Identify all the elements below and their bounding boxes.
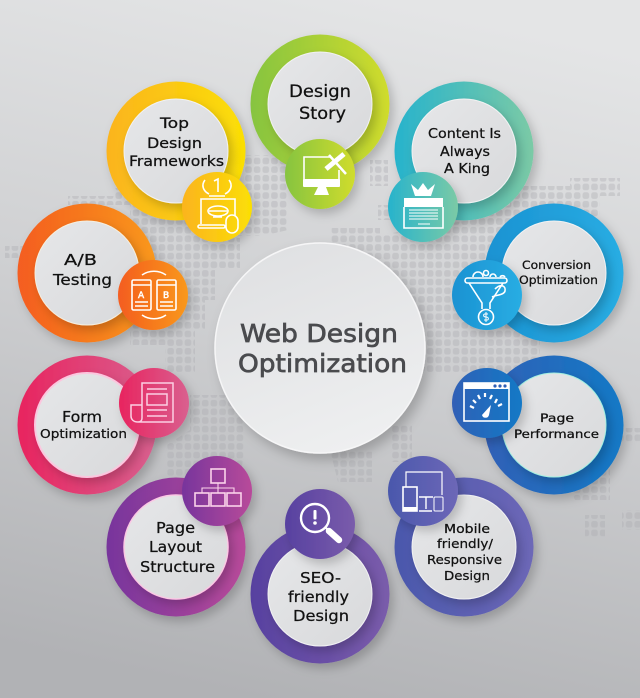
- icon: browser speed gauge: [464, 383, 509, 421]
- panel: Content Is Always A King: [388, 82, 534, 242]
- label: Page Layout Structure: Page: [156, 519, 195, 537]
- label: Content Is Always A King: [428, 127, 501, 177]
- panel: A/B Testing: [18, 204, 188, 342]
- icon: A/B browser windows: B: [163, 291, 169, 301]
- panel: Page Performance: [452, 356, 624, 494]
- icon: magnifier with exclamation: [301, 504, 339, 540]
- icon: monitor and pencil: [303, 154, 346, 195]
- label: A/B Testing: A/B: [64, 251, 97, 269]
- label: Page Layout Structure: Layout: [149, 538, 202, 556]
- label: SEO-friendly Design: Design: [293, 607, 349, 625]
- label: Form Optimization: Form: [62, 408, 102, 426]
- label: A/B Testing: Testing: [52, 271, 112, 289]
- label: Design Story: Design: [289, 82, 351, 102]
- label: Mobile friendly / Responsive Design: Responsive: [427, 552, 502, 567]
- label: Mobile friendly / Responsive Design: Mobile: [444, 521, 490, 536]
- panel: Page Layout Structure: [106, 456, 252, 616]
- label: SEO-friendly Design: friendly: [288, 588, 349, 606]
- icon: crown over document: [404, 183, 443, 228]
- panel: Design Story: [250, 34, 390, 209]
- label: Mobile friendly / Responsive Design: friendly/: [437, 536, 494, 551]
- label: Mobile friendly / Responsive Design: Design: [444, 568, 490, 583]
- label: Top Design Frameworks: Top: [159, 116, 189, 132]
- label: SEO-friendly Design: SEO-: [300, 569, 341, 587]
- label: Top Design Frameworks: [129, 116, 224, 170]
- label: Content Is Always A King: A King: [444, 162, 490, 177]
- label: Page Layout Structure: [140, 519, 215, 576]
- panel: Form Optimization: [18, 356, 189, 494]
- label: Page Layout Structure: Structure: [140, 558, 215, 576]
- icon: A/B browser windows: [132, 271, 176, 319]
- label: Design Story: [289, 82, 351, 124]
- icon: A/B browser windows: A: [138, 291, 145, 301]
- central circle: [215, 243, 425, 453]
- panel: Top Design Frameworks: [106, 82, 252, 242]
- label: Conversion Optimization: Optimization: [519, 273, 598, 287]
- label: Page Performance: [514, 411, 599, 441]
- label: Page Performance: Page: [540, 411, 574, 425]
- icon: rolled document form: [131, 383, 173, 422]
- central title: Web Design: [240, 319, 398, 348]
- label: Top Design Frameworks: Design: [147, 136, 202, 152]
- label: SEO-friendly Design: [288, 569, 349, 625]
- label: Mobile friendly / Responsive Design: [427, 521, 502, 583]
- icon: conversion funnel: [465, 270, 507, 324]
- label: Conversion Optimization: [519, 258, 598, 287]
- icon: sitemap hierarchy: [195, 469, 241, 506]
- icon: responsive devices: [403, 472, 443, 511]
- panel: Mobile friendly / Responsive Design: [388, 456, 534, 616]
- label: Content Is Always A King: Content Is: [428, 127, 501, 142]
- label: Form Optimization: Optimization: [40, 426, 127, 441]
- label: Page Performance: Performance: [514, 427, 599, 441]
- label: Content Is Always A King: Always: [440, 145, 490, 160]
- label: Form Optimization: [40, 408, 127, 441]
- panel: Conversion Optimization: [452, 204, 624, 342]
- central title: Optimization: [238, 349, 407, 378]
- central title: [238, 319, 407, 378]
- panel: SEO-friendly Design: [250, 489, 390, 664]
- label: A/B Testing: [52, 251, 112, 289]
- label: Top Design Frameworks: Frameworks: [129, 154, 224, 170]
- world map dot pattern: [5, 155, 640, 538]
- icon: award and monitor with mouse: [198, 179, 238, 233]
- label: Design Story: Story: [299, 104, 346, 124]
- label: Conversion Optimization: Conversion: [522, 258, 591, 272]
